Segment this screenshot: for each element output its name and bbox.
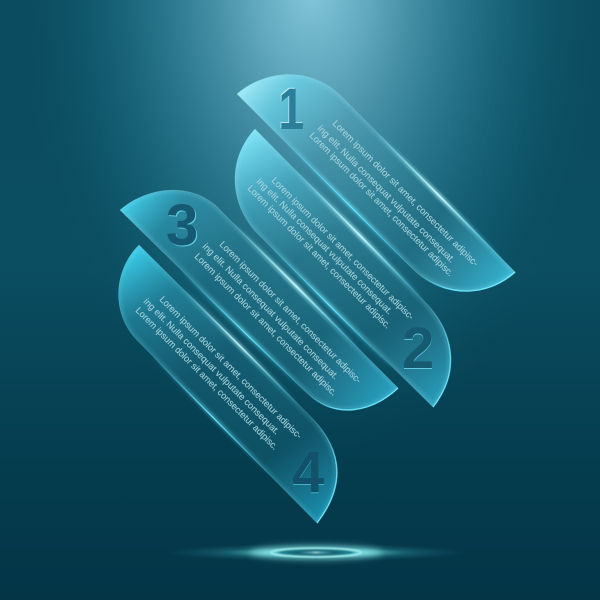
panel 3 text: Lorem ipsum dolor sit amet, consectetur adipisc-	[218, 239, 363, 385]
panel 2 text: Lorem ipsum dolor sit amet, consectetur adipisc-	[270, 175, 416, 322]
panel 1 glass shape	[237, 74, 515, 291]
panel 2 lower edge highlight	[265, 241, 395, 371]
panel 2 text: Lorem ipsum dolor sit amet, consectetur adipisc.	[246, 183, 393, 330]
panel 2 text: ing elit. Nulla consequat vulputate consequat.	[255, 176, 395, 316]
panel 3 number: 3	[166, 193, 198, 258]
panel 3 lower arc highlight	[307, 388, 398, 410]
panel 4 number: 4	[292, 441, 324, 506]
panel 4 text: ing elit. Nulla consequat vulputate consequat.	[142, 296, 282, 436]
panel 4 number: 4	[292, 440, 324, 505]
panel 4 text: Lorem ipsum dolor sit amet, consectetur adipisc-	[158, 294, 304, 441]
floor light	[166, 544, 466, 562]
panel 1 bottom arc highlight	[417, 272, 515, 291]
panel 2 number: 2	[402, 316, 434, 381]
panel 4 right arc highlight	[309, 415, 337, 523]
panel 1 text: Lorem ipsum dolor sit amet, consectetur adipisc-	[331, 118, 480, 268]
panel 3 glass shape	[120, 190, 398, 410]
panel 1 text: ing elit. Nulla consequat vulputate consequat.	[316, 123, 457, 265]
panel 2 inner rim glow	[235, 129, 451, 407]
panel 4 upper edge highlight	[180, 286, 300, 406]
panel 4 inner rim glow	[118, 245, 337, 523]
panel 3	[120, 190, 398, 410]
panel 1 upper edge highlight	[375, 131, 505, 262]
panel 3 upper edge highlight	[232, 222, 362, 352]
panel 2 glass shape	[235, 129, 451, 407]
panel 3 lower edge highlight	[180, 270, 310, 396]
panel 4	[118, 245, 337, 523]
panel 1 lower edge highlight	[285, 141, 415, 271]
panel 2 upper edge highlight	[295, 170, 425, 301]
panel 1 number: 1	[278, 76, 303, 141]
panel 4 lower edge highlight	[150, 354, 275, 480]
panel 2	[235, 129, 451, 407]
panel 3 text: Lorem ipsum dolor sit amet, consectetur adipisc.	[193, 251, 339, 398]
panel 1 number: 1	[278, 77, 304, 142]
panel 1 text: Lorem ipsum dolor sit amet, consectetur adipisc.	[308, 130, 455, 278]
panel 3 inner rim glow	[120, 190, 398, 410]
panel 4 text: Lorem ipsum dolor sit amet, consectetur adipisc.	[134, 305, 280, 452]
panel 3 number: 3	[167, 194, 199, 259]
panel 4 glass shape	[118, 245, 337, 523]
panel 2 number: 2	[402, 317, 434, 382]
panel 1	[237, 74, 515, 291]
panel 3 text: ing elit. Nulla consequat vulputate consequat.	[201, 241, 341, 381]
panel 1 inner rim glow	[262, 80, 514, 290]
panel 2 right arc highlight	[425, 302, 451, 407]
